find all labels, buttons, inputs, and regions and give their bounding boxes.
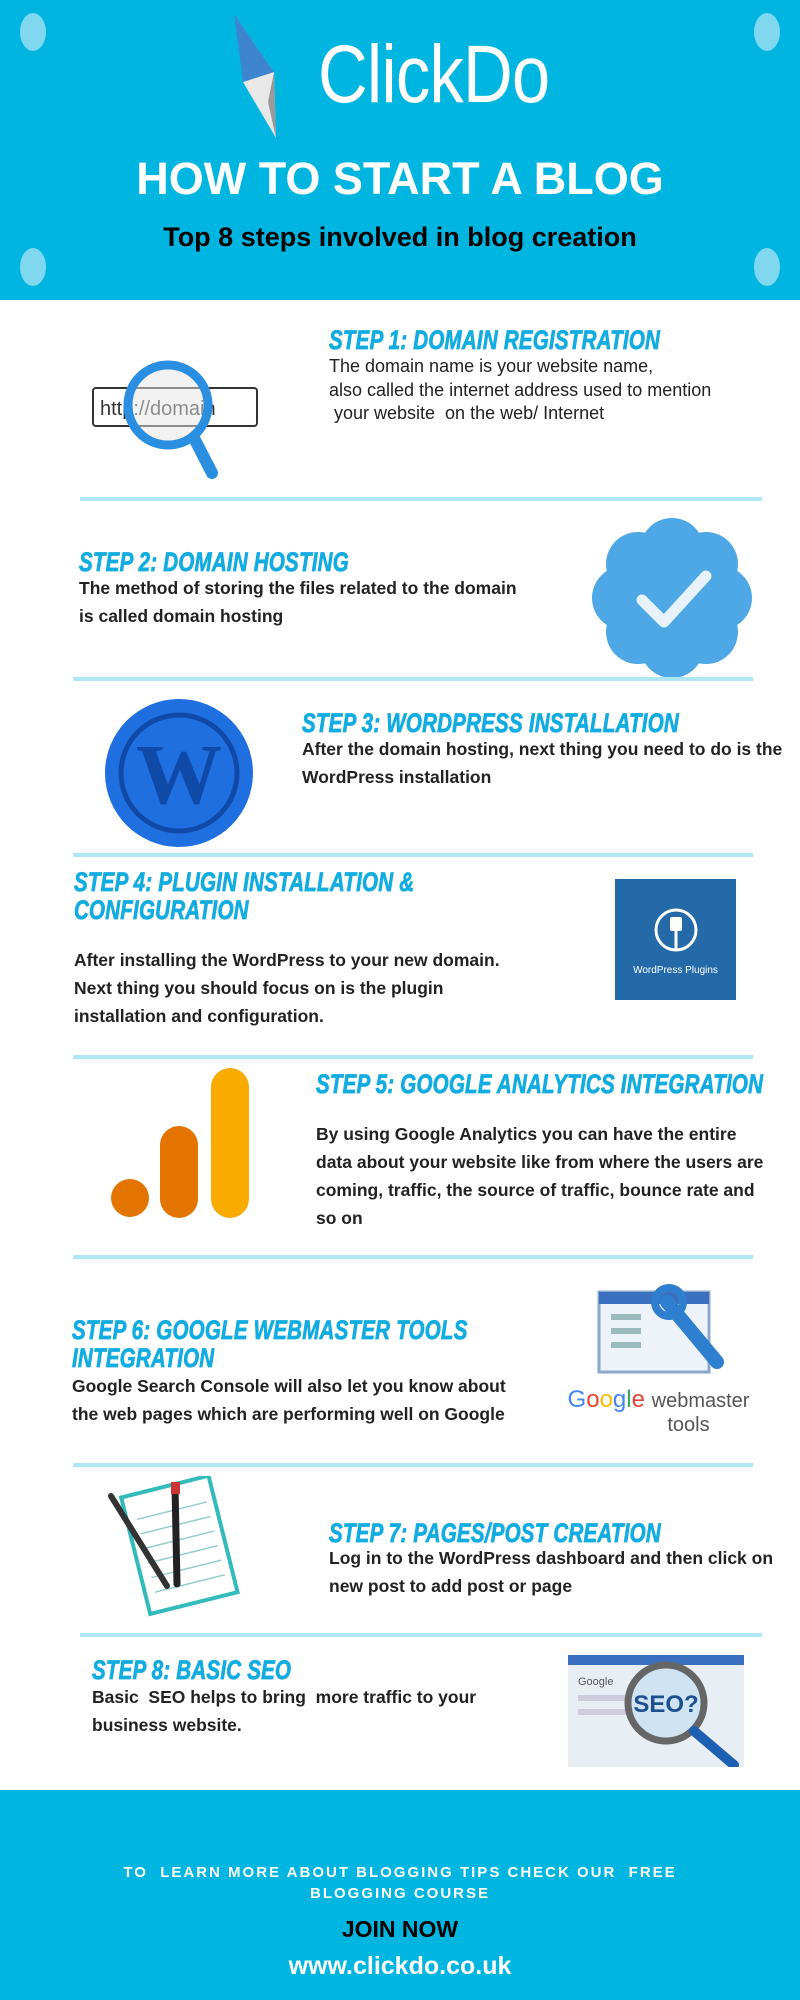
icon: wordpress logo xyxy=(105,699,253,847)
step 1 text: your website on the web/ Internet xyxy=(334,403,604,423)
icon: verified badge xyxy=(592,518,752,677)
step 5 text: so on xyxy=(316,1208,363,1228)
step 1 text: also called the internet address used to mention xyxy=(329,380,711,400)
decorative dots xyxy=(20,13,780,286)
step 7 xyxy=(108,1476,773,1616)
icon: seo magnifier: Google xyxy=(578,1676,613,1688)
step 8 xyxy=(92,1655,744,1767)
icon: google analytics bars xyxy=(111,1068,249,1218)
join now: JOIN NOW xyxy=(342,1916,458,1942)
step 5 text: By using Google Analytics you can have the entire xyxy=(316,1124,736,1144)
step 3 text xyxy=(302,739,782,787)
step 8 text xyxy=(92,1687,476,1735)
footer call to action: BLOGGING COURSE xyxy=(310,1885,490,1902)
title: HOW TO START A BLOG xyxy=(136,153,664,204)
step 1 text xyxy=(329,356,711,423)
step 2 xyxy=(78,518,752,677)
step 2 text xyxy=(79,578,517,626)
icon: wordpress logo: W xyxy=(136,726,222,822)
step 3 text: After the domain hosting, next thing you need to do is the xyxy=(302,739,782,759)
subtitle: Top 8 steps involved in blog creation xyxy=(163,222,637,252)
step 2 title: STEP 2: DOMAIN HOSTING xyxy=(79,547,349,577)
step 2 text: is called domain hosting xyxy=(79,606,283,626)
step 4 title: CONFIGURATION xyxy=(74,895,249,925)
step 6 title xyxy=(72,1315,468,1373)
step 2 text: The method of storing the files related to the domain xyxy=(79,578,517,598)
step 6 title: INTEGRATION xyxy=(72,1343,214,1373)
step 4 text: Next thing you should focus on is the plugin xyxy=(74,978,443,998)
icon: domain magnifier: http://domain xyxy=(100,398,216,420)
icon: diamond xyxy=(234,14,276,138)
logo: ClickDo xyxy=(234,14,549,138)
step 6 text: the web pages which are performing well on Google xyxy=(72,1404,505,1424)
icon: google webmaster tools xyxy=(568,1284,750,1436)
step 5 title: STEP 5: GOOGLE ANALYTICS INTEGRATION xyxy=(316,1069,763,1099)
step 6 xyxy=(72,1284,750,1436)
step 3 title: STEP 3: WORDPRESS INSTALLATION xyxy=(302,708,679,738)
step 7 text xyxy=(329,1548,773,1596)
header panel xyxy=(0,0,800,300)
step 6 text xyxy=(72,1376,506,1424)
icon: google webmaster tools: Google webmaster xyxy=(568,1386,749,1413)
step 4 text: After installing the WordPress to your new domain. xyxy=(74,950,500,970)
footer call to action: TO LEARN MORE ABOUT BLOGGING TIPS CHECK OUR FREE xyxy=(123,1864,677,1881)
step 6 text: Google Search Console will also let you know about xyxy=(72,1376,506,1396)
step 4 xyxy=(74,867,736,1026)
icon: wordpress plugins xyxy=(615,879,736,1000)
icon: wordpress plugins: WordPress Plugins xyxy=(633,965,718,976)
website url: www.clickdo.co.uk xyxy=(289,1952,511,1980)
footer panel xyxy=(0,1790,800,2000)
step 4 title: STEP 4: PLUGIN INSTALLATION & xyxy=(74,867,414,897)
logo text: ClickDo xyxy=(318,29,549,120)
icon: notebook and pens xyxy=(108,1476,240,1616)
step 4 title xyxy=(74,867,414,925)
step 4 text xyxy=(74,950,500,1026)
step 8 title: STEP 8: BASIC SEO xyxy=(92,1655,291,1685)
step 1 xyxy=(92,325,711,479)
footer call to action xyxy=(123,1864,677,1902)
step 5 text xyxy=(316,1124,763,1228)
icon: seo magnifier: SEO? xyxy=(633,1691,699,1718)
step 4 text: installation and configuration. xyxy=(74,1006,324,1026)
step 7 text: Log in to the WordPress dashboard and then click on xyxy=(329,1548,773,1568)
step 7 text: new post to add post or page xyxy=(329,1576,572,1596)
step 1 title: STEP 1: DOMAIN REGISTRATION xyxy=(329,325,660,355)
step 8 text: business website. xyxy=(92,1715,242,1735)
icon: seo magnifier xyxy=(568,1655,744,1767)
step 5 xyxy=(111,1068,764,1228)
step 5 text: coming, traffic, the source of traffic, bounce rate and xyxy=(316,1180,755,1200)
step 1 text: The domain name is your website name, xyxy=(329,356,653,376)
icon: domain magnifier xyxy=(92,360,258,479)
step 5 text: data about your website like from where the users are xyxy=(316,1152,763,1172)
step 7 title: STEP 7: PAGES/POST CREATION xyxy=(329,1518,661,1548)
step 3 text: WordPress installation xyxy=(302,767,491,787)
step 6 title: STEP 6: GOOGLE WEBMASTER TOOLS xyxy=(72,1315,468,1345)
step 8 text: Basic SEO helps to bring more traffic to your xyxy=(92,1687,476,1707)
icon: google webmaster tools: tools xyxy=(667,1414,710,1436)
step 3 xyxy=(105,699,782,847)
